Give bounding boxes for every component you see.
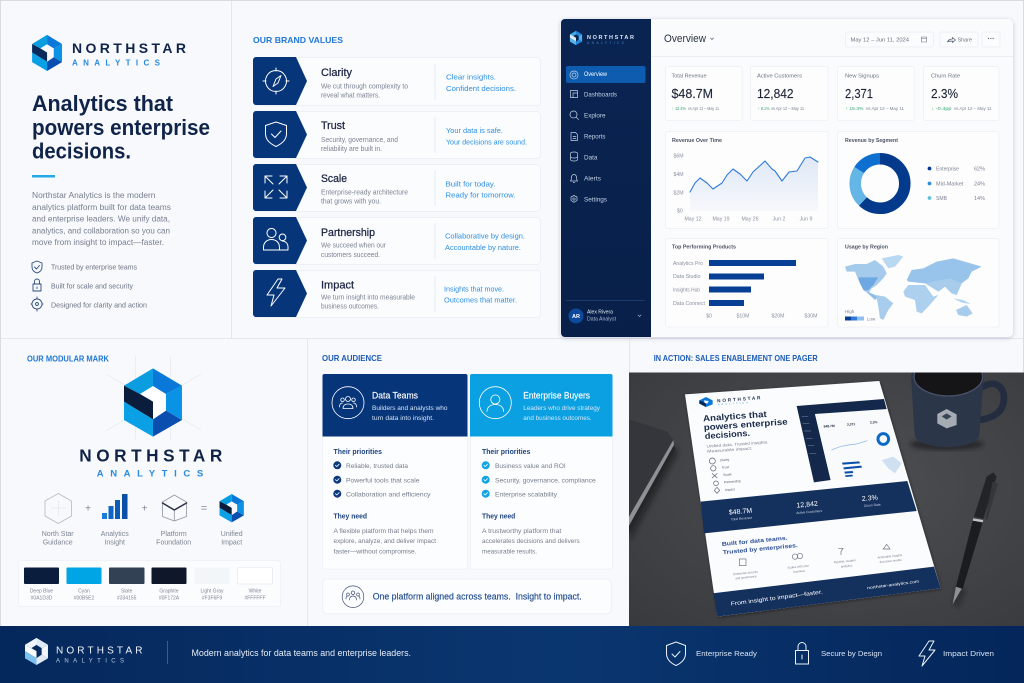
- icon: unified impact mark: Impact: [221, 540, 242, 546]
- audience column: enterprise buyers: Their priorities: [482, 449, 530, 456]
- flyer footer text: [731, 580, 919, 606]
- equals: =: [201, 502, 207, 514]
- audience column: data teams: Data Teams: [372, 390, 419, 400]
- flyer stats: Total Revenue: [731, 516, 752, 522]
- photo: desk scene: [628, 357, 1024, 626]
- value card: impact: [253, 270, 540, 318]
- KPI: active customers: ↑ 8.1%: [758, 106, 770, 111]
- icon: platform cube: Platform: [161, 531, 187, 538]
- icon: lock: [33, 279, 41, 291]
- icon: platform cube: [156, 495, 191, 546]
- footer bar: [0, 626, 1024, 683]
- colour swatches: #0A1D3D: [31, 596, 53, 602]
- flyer footer text: From insight to impact—faster.: [730, 590, 824, 608]
- value card: clarity: reveal what matters.: [321, 90, 380, 100]
- feature list: Designed for clarity and action: [51, 300, 147, 310]
- value card: clarity: Clarity: [321, 67, 352, 79]
- panel: brand values: [253, 35, 540, 318]
- icon: team: [332, 387, 364, 419]
- feature list: Trusted by enterprise teams: [51, 262, 137, 272]
- flyer proof section: Actionable insights: [877, 553, 903, 560]
- value card: scale: Enterprise-ready architecture: [321, 188, 408, 196]
- icon: north star guidance: [42, 494, 74, 546]
- icon: logo mark: [32, 35, 62, 71]
- audience column: data teams: Their priorities: [334, 449, 382, 456]
- flyer dashboard mockup: [797, 399, 907, 482]
- icon: person: [479, 387, 511, 419]
- icon: platform cube: Foundation: [156, 540, 191, 546]
- audience column: data teams: Builders and analysts who: [372, 405, 448, 412]
- value card: impact: business outcomes.: [321, 302, 379, 310]
- value card: partnership: customers succeed.: [321, 250, 380, 259]
- bar chart: top performing products: Data Connect: [673, 301, 706, 307]
- bar chart: top performing products: $30M: [805, 314, 817, 320]
- logo: Northstar: ANALYTICS: [72, 58, 161, 68]
- panel: dashboard: [560, 19, 1013, 337]
- donut legend: 62%: [974, 166, 985, 172]
- icon: shield: [32, 261, 42, 273]
- user profile: [566, 300, 645, 324]
- KPI: churn rate: ↓ -0.4pp: [932, 106, 952, 111]
- headline: [32, 91, 210, 164]
- sidebar logo: ANALYTICS: [587, 41, 625, 45]
- check list: Powerful tools that scale: [346, 478, 420, 484]
- flyer proof section: and governance: [735, 574, 757, 580]
- navigation items: [570, 71, 617, 204]
- icon: people: [264, 228, 288, 250]
- flyer proof section: business: [793, 569, 806, 574]
- donut legend: [928, 166, 985, 202]
- value card: partnership: Accountable by nature.: [445, 243, 521, 252]
- check list: Reliable, trusted data: [346, 463, 408, 470]
- audience column: data teams: A flexible platform that helps them: [334, 528, 434, 535]
- icon: unified impact mark: Unified: [221, 531, 243, 538]
- audience column: enterprise buyers: Enterprise Buyers: [523, 390, 591, 400]
- sidebar logo: [570, 31, 634, 45]
- line chart: revenue over time: $6M: [674, 154, 684, 160]
- flyer proof section: Flexible, modern: [834, 558, 856, 564]
- KPI: active customers: vs Apr 12 – May 11: [771, 106, 804, 111]
- callout: one platform: One platform aligned across teams. Insight to impact.: [373, 592, 582, 602]
- KPI: churn rate: Churn Rate: [931, 74, 960, 80]
- KPI: new signups: vs Apr 12 – May 11: [866, 106, 904, 111]
- donut legend: Mid-Market: [936, 182, 964, 188]
- sidebar logo: NORTHSTAR: [587, 35, 634, 41]
- active nav highlight: [566, 66, 646, 83]
- map legend: Low: [867, 316, 876, 322]
- navigation items: Data: [584, 154, 598, 162]
- KPI: new signups: ↑ 15.3%: [846, 106, 864, 111]
- badge: enterprise ready: Enterprise Ready: [696, 649, 757, 658]
- check list: [482, 461, 596, 499]
- icon: analytics bars: Analytics: [101, 531, 129, 538]
- badge: secure by design: Secure by Design: [821, 649, 882, 658]
- map: usage by region: [838, 238, 999, 327]
- audience column: enterprise buyers: accelerates decisions and delivers: [482, 538, 580, 545]
- audience column: enterprise buyers: A trustworthy platform that: [482, 528, 561, 535]
- bar chart: top performing products: [666, 238, 828, 327]
- flyer dashboard mockup: 2.3%: [870, 420, 878, 425]
- flyer stats: Active Customers: [796, 509, 823, 515]
- flyer stats: 12,842: [796, 501, 818, 510]
- flyer stats: Churn Rate: [864, 503, 881, 508]
- colour swatches: White: [249, 588, 262, 594]
- value card: impact: Outcomes that matter.: [444, 296, 517, 304]
- flyer proof section: Scales with your: [787, 564, 809, 570]
- colour swatches: #F3F6F9: [202, 596, 222, 602]
- flyer stats: [729, 495, 881, 522]
- value card: partnership: [253, 217, 540, 264]
- user profile: Data Analyst: [587, 316, 617, 322]
- flyer value list: Trust: [721, 465, 729, 470]
- navigation items: Overview: [584, 71, 607, 78]
- bar chart: top performing products: $0: [706, 314, 712, 320]
- donut chart: revenue by segment: [838, 132, 999, 228]
- bar chart: top performing products: Insights Hub: [673, 287, 700, 293]
- KPI: total revenue: ↑ 12.4%: [672, 106, 686, 111]
- panel: modular mark: [18, 354, 280, 606]
- flyer dashboard mockup: $48.7M: [823, 424, 835, 429]
- flyer subhead: Measurable impact.: [707, 446, 753, 454]
- audience column: data teams: They need: [334, 514, 367, 521]
- map: usage by region: Usage by Region: [845, 244, 889, 250]
- colour swatches: Graphite: [159, 588, 179, 594]
- value card: scale: that grows with you.: [321, 196, 381, 206]
- plus: +: [142, 504, 148, 514]
- flyer proof section: Built for data teams.: [722, 536, 788, 548]
- colour swatches: Deep Blue: [30, 588, 53, 594]
- icon: shield: [266, 122, 286, 146]
- donut legend: SMB: [936, 196, 947, 202]
- dashboard header: May 12 – Jun 11, 2024: [850, 38, 910, 44]
- dashboard header: Share: [958, 38, 972, 44]
- plus: +: [85, 504, 91, 514]
- check list: [333, 461, 431, 499]
- audience column: enterprise buyers: They need: [482, 514, 515, 521]
- callout: one platform: [323, 579, 611, 614]
- flyer value list: Clarity: [720, 458, 730, 462]
- map legend: High: [845, 309, 855, 314]
- value card: trust: Your decisions are sound.: [446, 138, 527, 146]
- KPI: total revenue: vs Apr 12 – May 11: [688, 106, 719, 111]
- value card: impact: Insights that move.: [444, 284, 504, 294]
- flyer proof section: Trusted by enterprises.: [723, 543, 799, 556]
- line chart: revenue over time: [666, 132, 828, 228]
- bar chart: top performing products: $10M: [737, 314, 749, 320]
- audience column: data teams: [322, 374, 468, 569]
- heading: our brand values: OUR BRAND VALUES: [253, 35, 343, 45]
- footer logo: NORTHSTAR: [56, 646, 142, 656]
- value card: trust: Security, governance, and: [321, 135, 398, 144]
- user profile: AR: [572, 314, 580, 320]
- line chart: revenue over time: May 26: [741, 216, 759, 222]
- value card: clarity: [253, 57, 540, 106]
- badge: impact driven: [919, 641, 994, 666]
- value card: partnership: Partnership: [321, 227, 375, 239]
- line chart: revenue over time: $2M: [674, 190, 684, 196]
- icon: north star guidance: North Star: [42, 531, 74, 538]
- value card: trust: [253, 111, 540, 158]
- bar chart: top performing products: Top Performing Products: [672, 244, 736, 250]
- value card: scale: Scale: [321, 173, 347, 185]
- line chart: revenue over time: $4M: [674, 172, 684, 178]
- check list: Business value and ROI: [495, 463, 566, 470]
- colour swatches: #0F172A: [159, 596, 180, 602]
- bar chart: top performing products: $20M: [772, 314, 784, 320]
- KPI: total revenue: Total Revenue: [672, 74, 706, 80]
- dashboard header: ···: [988, 36, 994, 43]
- pen: [953, 472, 998, 608]
- flyer dashboard mockup: 3,371: [847, 422, 856, 427]
- donut legend: 24%: [974, 182, 985, 188]
- audience column: data teams: turn data into insight.: [372, 415, 434, 422]
- KPI: churn rate: 2.3%: [931, 86, 958, 101]
- navigation items: Dashboards: [584, 92, 617, 98]
- KPI: churn rate: [924, 66, 999, 120]
- flyer value list: [709, 458, 741, 493]
- value card: scale: Ready for tomorrow.: [446, 190, 516, 200]
- check list: Collaboration and efficiency: [346, 492, 431, 499]
- line chart: revenue over time: May 12: [684, 216, 702, 222]
- check list: Security, governance, compliance: [495, 478, 596, 484]
- donut legend: 14%: [974, 196, 985, 202]
- flyer value list: Scale: [723, 472, 732, 477]
- logo: Northstar: [32, 35, 186, 71]
- audience column: data teams: faster—without compromise.: [334, 548, 417, 556]
- intro paragraph: Northstar Analytics is the modern: [32, 190, 156, 200]
- intro paragraph: move from insight to impact—faster.: [32, 237, 164, 247]
- colour swatches: #334155: [117, 596, 137, 602]
- map legend: [845, 309, 876, 322]
- value card: impact: We turn insight into measurable: [321, 292, 415, 302]
- icon: unified impact mark: [220, 494, 244, 546]
- audience column: data teams: explore, analyze, and deliver impact: [334, 538, 436, 545]
- footer logo: ANALYTICS: [56, 658, 124, 664]
- colour swatches: #00B5E2: [74, 596, 95, 602]
- navigation items: Settings: [584, 196, 607, 204]
- KPI: churn rate: vs Apr 12 – May 11: [954, 106, 992, 111]
- icon: analytics bars: [101, 494, 129, 546]
- flyer subhead: [706, 441, 768, 453]
- flyer value list: Partnership: [724, 479, 741, 484]
- icon: bolt: [267, 279, 285, 306]
- intro paragraph: analytics, and collaboration so you can: [32, 226, 170, 236]
- KPI: total revenue: [666, 66, 742, 120]
- flyer logo: ANALYTICS: [718, 401, 748, 406]
- flyer proof section: analytics: [841, 563, 853, 569]
- user profile: Alex Rivera: [587, 310, 613, 316]
- feature list: [31, 261, 147, 311]
- badge: impact driven: Impact Driven: [943, 649, 994, 658]
- dashboard sidebar: [561, 19, 651, 337]
- flyer subhead: Unified data. Trusted insights.: [706, 439, 769, 449]
- value card: scale: Built for today.: [446, 180, 496, 188]
- footer logo: [25, 638, 143, 665]
- line chart: revenue over time: $0: [677, 208, 683, 214]
- flyer value list: Impact: [725, 487, 735, 492]
- construction guide lines: [106, 356, 201, 440]
- value card: partnership: Collaborative by design.: [445, 232, 525, 240]
- notebook: [628, 419, 678, 542]
- colour swatches: Cyan: [78, 588, 90, 594]
- value card: clarity: We cut through complexity to: [321, 82, 408, 90]
- flyer headline: decisions.: [704, 428, 750, 441]
- accent rule: [32, 175, 55, 178]
- large logo mark: [124, 368, 182, 437]
- flyer headline: Analytics that: [703, 409, 767, 423]
- value card: trust: Trust: [321, 120, 345, 132]
- audience column: enterprise buyers: measurable results.: [482, 548, 537, 556]
- audience column: enterprise buyers: [470, 374, 612, 569]
- colour swatches: Slate: [121, 588, 133, 594]
- icon: analytics bars: Insight: [104, 540, 125, 546]
- wordmark: ANALYTICS: [97, 469, 203, 480]
- KPI: active customers: [750, 66, 828, 120]
- wordmark: [79, 446, 223, 480]
- heading: our modular mark: OUR MODULAR MARK: [27, 354, 110, 364]
- value card: trust: Your data is safe.: [446, 126, 503, 135]
- badge: secure by design: [796, 642, 882, 664]
- dashboard header: [651, 32, 1013, 56]
- coffee mug: [909, 372, 1008, 452]
- check list: Enterprise scalability: [495, 492, 558, 499]
- navigation items: Reports: [584, 134, 606, 140]
- value card: trust: reliability are built in.: [321, 144, 382, 153]
- flyer proof section: that drive results: [879, 558, 902, 564]
- icon: expand arrows: [265, 176, 287, 198]
- footer tagline: Modern analytics for data teams and enterprise leaders.: [192, 648, 411, 658]
- panel: audience: [322, 353, 612, 614]
- KPI: total revenue: $48.7M: [672, 86, 713, 101]
- dashboard header: Overview: [664, 33, 706, 45]
- heading: in action: IN ACTION: SALES ENABLEMENT ONE PAGER: [654, 353, 818, 363]
- KPI: active customers: Active Customers: [757, 74, 802, 80]
- audience column: enterprise buyers: and business outcomes.: [523, 415, 592, 422]
- heading: our audience: OUR AUDIENCE: [322, 353, 382, 363]
- panel: in action: [628, 353, 1024, 626]
- flyer headline: powers enterprise: [703, 416, 788, 432]
- KPI: new signups: [838, 66, 914, 120]
- sales one pager: [685, 381, 941, 617]
- KPI: new signups: New Signups: [845, 74, 879, 80]
- donut chart: revenue by segment: Revenue by Segment: [845, 138, 898, 144]
- line chart: revenue over time: Jun 9: [800, 216, 812, 222]
- intro paragraph: analytics platform built for data teams: [32, 202, 172, 212]
- audience column: enterprise buyers: Leaders who drive strategy: [523, 405, 601, 412]
- KPI: new signups: 2,371: [845, 86, 873, 101]
- flyer proof section: Enterprise security: [733, 570, 759, 576]
- badge: enterprise ready: [666, 642, 757, 666]
- bar chart: top performing products: Data Studio: [673, 274, 701, 280]
- colour swatches: Light Gray: [200, 588, 224, 594]
- colour swatches: #FFFFFF: [244, 596, 266, 602]
- icon: north star guidance: Guidance: [43, 540, 73, 546]
- intro paragraph: [32, 190, 172, 247]
- flyer proof section: [722, 536, 903, 580]
- value card: partnership: We succeed when our: [321, 240, 387, 250]
- icon: aligned team: [342, 586, 364, 608]
- icon: compass: [263, 68, 289, 94]
- colour swatches: [18, 560, 280, 606]
- logo: Northstar: NORTHSTAR: [72, 40, 186, 56]
- feature list: Built for scale and security: [51, 282, 133, 290]
- headline: decisions.: [32, 138, 131, 164]
- flyer stats: 2.3%: [862, 495, 878, 503]
- flyer footer text: northstar-analytics.com: [867, 578, 920, 590]
- flyer logo: [699, 395, 761, 407]
- KPI: active customers: 12,842: [757, 86, 794, 101]
- line chart: revenue over time: Revenue Over Time: [672, 138, 722, 144]
- flyer logo: NORTHSTAR: [717, 395, 761, 403]
- navigation items: Alerts: [584, 176, 601, 182]
- value card: clarity: Confident decisions.: [446, 84, 516, 93]
- value card: clarity: Clear insights.: [446, 72, 496, 82]
- icon: target: [31, 297, 43, 311]
- wordmark: NORTHSTAR: [79, 446, 223, 466]
- value card: impact: Impact: [321, 280, 354, 292]
- flyer headline: [704, 411, 788, 439]
- panel: brand intro: [31, 35, 210, 311]
- bar chart: top performing products: Analytics Pro: [673, 261, 703, 267]
- intro paragraph: and enterprise leaders. We unify data,: [32, 214, 170, 224]
- donut legend: Enterprise: [936, 166, 959, 172]
- flyer stats: $48.7M: [729, 508, 753, 517]
- headline: powers enterprise: [32, 115, 210, 140]
- line chart: revenue over time: Jun 2: [773, 216, 785, 222]
- line chart: revenue over time: May 19: [712, 216, 730, 222]
- navigation items: Explore: [584, 112, 606, 120]
- headline: Analytics that: [32, 91, 174, 116]
- value card: scale: [253, 164, 540, 212]
